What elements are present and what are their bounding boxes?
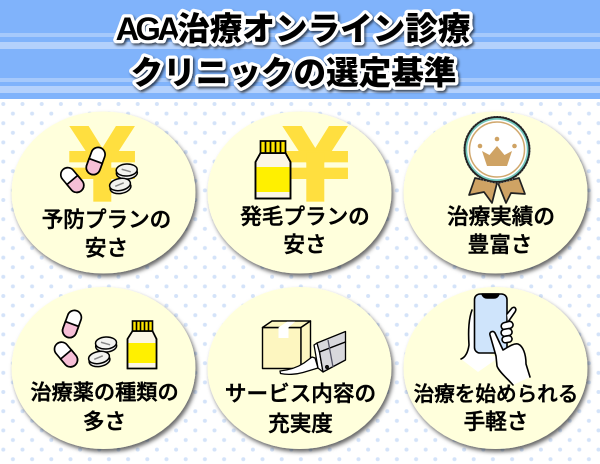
- panel: ease of starting: [404, 287, 588, 449]
- label: [42, 207, 171, 260]
- panel: treatment record: [404, 112, 588, 274]
- icon: tablet lower: [88, 350, 111, 368]
- panel: service content: [208, 287, 392, 449]
- icon: yen sign: [69, 126, 135, 202]
- icon: medal: [464, 116, 530, 203]
- label: 多さ: [83, 409, 126, 434]
- icon: capsule upper: [61, 308, 83, 340]
- header banner: [0, 0, 600, 99]
- icon: bottle: [256, 141, 290, 198]
- label: 豊富さ: [468, 232, 532, 257]
- label: 発毛プランの: [240, 204, 370, 229]
- icon: tablet upper: [95, 336, 117, 353]
- label: サービス内容の: [225, 381, 376, 406]
- label: 充実度: [268, 411, 333, 436]
- label: [30, 380, 179, 434]
- icon: yen sign: [282, 126, 348, 202]
- icon: bottle: [128, 321, 156, 368]
- label: 安さ: [85, 236, 128, 260]
- label: 手軽さ: [464, 409, 528, 434]
- title: AGA治療オンライン診療: [116, 10, 471, 47]
- label: 安さ: [283, 232, 327, 257]
- icon: delivery hand: [280, 332, 346, 374]
- icon: capsule upper: [84, 145, 107, 177]
- label: 予防プランの: [42, 207, 171, 232]
- icon: capsule lower: [58, 165, 87, 195]
- label: 治療実績の: [447, 204, 555, 229]
- icon: tablet lower: [109, 177, 132, 195]
- label: 治療薬の種類の: [30, 380, 179, 404]
- icon: hand holding smartphone: [461, 294, 530, 385]
- label: [447, 204, 555, 257]
- title: クリニックの選定基準: [131, 54, 456, 91]
- label: [240, 204, 370, 257]
- panel: variety of medicines: [12, 287, 196, 449]
- panel: prevention plan price: [12, 112, 196, 274]
- label: 治療を始められる: [414, 383, 578, 406]
- title: [116, 10, 471, 91]
- icon: capsule lower: [52, 339, 80, 370]
- label: [414, 383, 578, 434]
- label: [225, 381, 376, 436]
- icon: cardboard box: [262, 321, 310, 368]
- icon: tablet upper: [116, 163, 138, 180]
- panel: hair growth plan price: [208, 112, 392, 274]
